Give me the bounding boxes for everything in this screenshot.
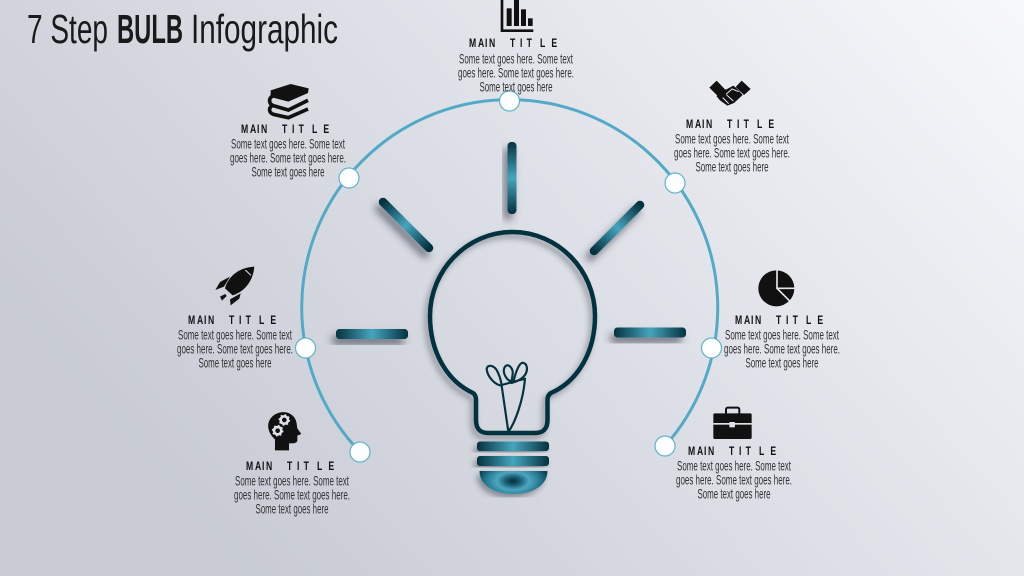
text block: Some text goes here <box>198 355 272 371</box>
text block: Some text goes here <box>256 501 329 517</box>
panel: head with gears step <box>234 412 350 517</box>
icon: pie chart <box>758 269 796 306</box>
text block: goes here. Some text goes here. <box>177 341 293 357</box>
text block <box>724 327 840 371</box>
panel: pie chart step <box>724 269 840 371</box>
panel: top bar chart step <box>458 0 574 95</box>
icon: head with gears <box>268 412 301 450</box>
title <box>27 6 338 52</box>
text block: goes here. Some text goes here. <box>230 150 346 166</box>
text block <box>177 327 293 371</box>
panel: rocket step <box>177 267 293 371</box>
text block: Some text goes here <box>480 79 553 95</box>
text block: goes here. Some text goes here. <box>458 65 574 81</box>
text block <box>234 473 350 517</box>
text block: goes here. Some text goes here. <box>676 472 792 488</box>
text block: goes here. Some text goes here. <box>234 487 350 503</box>
text block <box>674 131 790 175</box>
bulb outline <box>430 232 595 433</box>
text block: Some text goes here. Some text <box>178 327 292 343</box>
text block: goes here. Some text goes here. <box>724 341 840 357</box>
text block: Some text goes here. Some text <box>677 458 791 474</box>
heading: MAIN TITLE <box>688 446 776 458</box>
heading: MAIN TITLE <box>188 315 276 327</box>
heading: MAIN TITLE <box>246 461 334 473</box>
heading: MAIN TITLE <box>735 315 823 327</box>
timeline nodes <box>296 91 722 462</box>
ray: top <box>508 142 516 214</box>
text block: Some text goes here <box>696 159 769 175</box>
title: BULB <box>117 6 183 52</box>
filament <box>487 363 527 432</box>
text block: goes here. Some text goes here. <box>674 145 790 161</box>
text block: Some text goes here. Some text <box>459 51 573 67</box>
heading: MAIN TITLE <box>241 124 329 136</box>
light rays <box>336 142 686 339</box>
panel: books step <box>230 84 346 180</box>
heading: MAIN TITLE <box>469 38 557 50</box>
panel: briefcase step <box>676 408 792 502</box>
ray: upper right <box>594 205 640 251</box>
text block <box>458 51 574 95</box>
icon: briefcase <box>713 408 752 439</box>
ray: right <box>614 328 686 338</box>
heading: MAIN TITLE <box>686 119 774 131</box>
icon: books <box>270 84 309 118</box>
arc timeline <box>302 100 718 452</box>
bulb base <box>477 442 549 494</box>
text block: Some text goes here <box>698 486 771 502</box>
ray: upper left <box>383 202 429 248</box>
icon: bar chart <box>501 0 533 32</box>
text block: Some text goes here. Some text <box>231 136 345 152</box>
text block <box>230 136 346 180</box>
ray: left <box>336 329 408 339</box>
text block <box>676 458 792 502</box>
title: 7 Step <box>27 6 108 52</box>
icon: rocket <box>215 267 254 305</box>
text block: Some text goes here. Some text <box>675 131 789 147</box>
text block: Some text goes here <box>746 355 819 371</box>
text block: Some text goes here. Some text <box>725 327 839 343</box>
icon: handshake <box>709 81 751 106</box>
text block: Some text goes here <box>252 164 325 180</box>
light bulb <box>430 232 595 494</box>
panel: handshake step <box>674 81 790 175</box>
title: Infographic <box>191 6 338 52</box>
text block: Some text goes here. Some text <box>235 473 349 489</box>
